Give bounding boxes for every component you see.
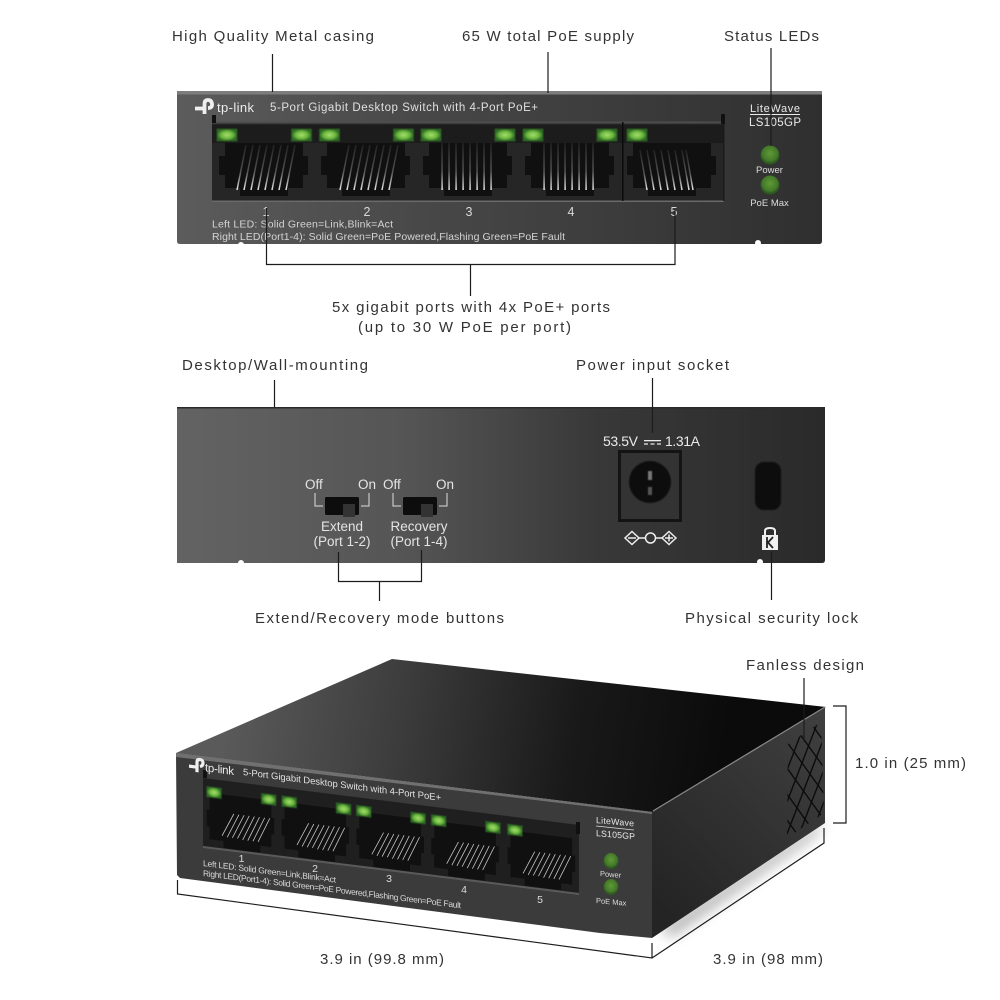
- panel: front view of switch: [177, 91, 822, 248]
- switch: extend: (Port 1-2): [313, 534, 371, 549]
- port recess 3D: [203, 778, 579, 893]
- polarity symbol: [625, 532, 676, 544]
- 3D title: 5-Port Gigabit Desktop Switch with 4-Port PoE+: [243, 767, 441, 804]
- power socket: [618, 450, 682, 522]
- port numbers: 2: [364, 205, 371, 219]
- label: 65 W total PoE supply: 65 W total PoE supply: [462, 28, 634, 45]
- label: Extend/Recovery mode buttons: Extend/Recovery mode buttons: [255, 610, 504, 627]
- port numbers: [263, 205, 678, 219]
- 3D logo: tp-link: [205, 762, 234, 778]
- switch: recovery: Off: [383, 477, 401, 492]
- front face: [176, 753, 652, 938]
- 3D power LED: [604, 853, 618, 869]
- 3D PoE label: PoE Max: [596, 896, 627, 908]
- 3D power label: Power: [600, 869, 622, 880]
- switch: recovery: Recovery: [390, 519, 448, 534]
- label: width: 3.9 in (99.8 mm): [320, 951, 444, 968]
- Kensington icon: [762, 528, 778, 550]
- panel: rear view of switch: [177, 407, 825, 566]
- 3D port numbers: 5: [537, 894, 543, 906]
- label: depth: 3.9 in (98 mm): [713, 951, 823, 968]
- label: Status LEDs: Status LEDs: [724, 28, 819, 45]
- voltage rating: 1.31A: [665, 433, 701, 449]
- 3D model badge: [596, 815, 635, 842]
- label: Desktop/Wall-mounting: Desktop/Wall-mounting: [182, 357, 368, 374]
- 3D logo: [189, 758, 234, 778]
- panel: 3D view of switch: [176, 659, 826, 938]
- 3D PoE LED: [604, 879, 618, 895]
- leader lines: 3D dimensions: [178, 678, 846, 958]
- voltage rating: [603, 433, 701, 449]
- rear plate: [177, 407, 825, 563]
- top edge highlight: [653, 707, 825, 811]
- label: Fanless design: Fanless design: [746, 657, 864, 674]
- 3D ports: [207, 786, 575, 892]
- product title: 5-Port Gigabit Desktop Switch with 4-Port PoE+: [270, 102, 538, 114]
- power LED: [760, 146, 780, 164]
- 3D port numbers: 3: [386, 873, 392, 885]
- side face: [652, 707, 825, 938]
- vent lattice: [787, 724, 824, 834]
- port recess: [212, 114, 725, 202]
- 3D model badge: LS105GP: [596, 828, 635, 842]
- model badge: LiteWave: [750, 103, 800, 115]
- PoE Max LED: [760, 176, 780, 194]
- LED legend: Right LED(Port1-4): Solid Green=PoE Powered,Flashing Green=PoE Fault: [212, 231, 565, 243]
- RJ45 port 1: [219, 143, 308, 196]
- 3D port numbers: 2: [312, 863, 318, 875]
- leader lines: front view: [266, 48, 771, 296]
- leader lines: rear view: [274, 378, 772, 601]
- port numbers: 4: [568, 205, 575, 219]
- label: High Quality Metal casing: High Quality Metal casing: [172, 28, 374, 45]
- label: Power input socket: Power input socket: [576, 357, 730, 374]
- front plate: [177, 91, 822, 244]
- label: height: 1.0 in (25 mm): [855, 755, 966, 772]
- model badge: [749, 103, 801, 129]
- switch: extend: Off: [305, 477, 323, 492]
- RJ45 port 4: [525, 143, 614, 196]
- 3D port numbers: 1: [239, 853, 245, 865]
- switch: extend: [305, 477, 376, 549]
- LED legend: [212, 218, 565, 243]
- switch: recovery: (Port 1-4): [390, 534, 448, 549]
- logo: tp-link: tp-link: [217, 100, 254, 115]
- port numbers: 5: [671, 205, 678, 219]
- 3D LED legend: Left LED: Solid Green=Link,Blink=Act: [203, 858, 337, 885]
- label: 5x gigabit ports: 5x gigabit ports with 4x PoE+ ports: [332, 299, 610, 316]
- voltage rating: 53.5V: [603, 433, 639, 449]
- port numbers: 3: [466, 205, 473, 219]
- security lock slot: [755, 462, 781, 510]
- label: Physical security lock: Physical security lock: [685, 610, 858, 627]
- switch: recovery: [383, 477, 454, 549]
- switch: recovery: On: [436, 477, 454, 492]
- RJ45 port 3: [423, 143, 512, 196]
- power LED label: Power: [756, 165, 783, 176]
- port numbers: 1: [263, 205, 270, 219]
- label: up to 30 W PoE per port: (up to 30 W PoE per port): [358, 319, 571, 336]
- 3D model badge: LiteWave: [596, 815, 634, 828]
- logo: tp-link: [195, 100, 254, 115]
- port LEDs: [217, 129, 647, 141]
- PoE Max label: PoE Max: [750, 198, 789, 209]
- model badge: LS105GP: [749, 117, 801, 129]
- LED legend: Left LED: Solid Green=Link,Blink=Act: [212, 218, 393, 230]
- 3D port numbers: [239, 853, 543, 906]
- RJ45 port 2: [321, 143, 410, 196]
- 3D port numbers: 4: [461, 884, 467, 896]
- ground shadow: [660, 820, 825, 936]
- switch: extend: On: [358, 477, 376, 492]
- 3D LED legend: Right LED(Port1-4): Solid Green=PoE Powered,Flashing Green=PoE Fault: [203, 868, 462, 910]
- RJ45 port 5: [627, 143, 716, 196]
- switch: extend: Extend: [321, 519, 363, 534]
- top face: [176, 659, 826, 812]
